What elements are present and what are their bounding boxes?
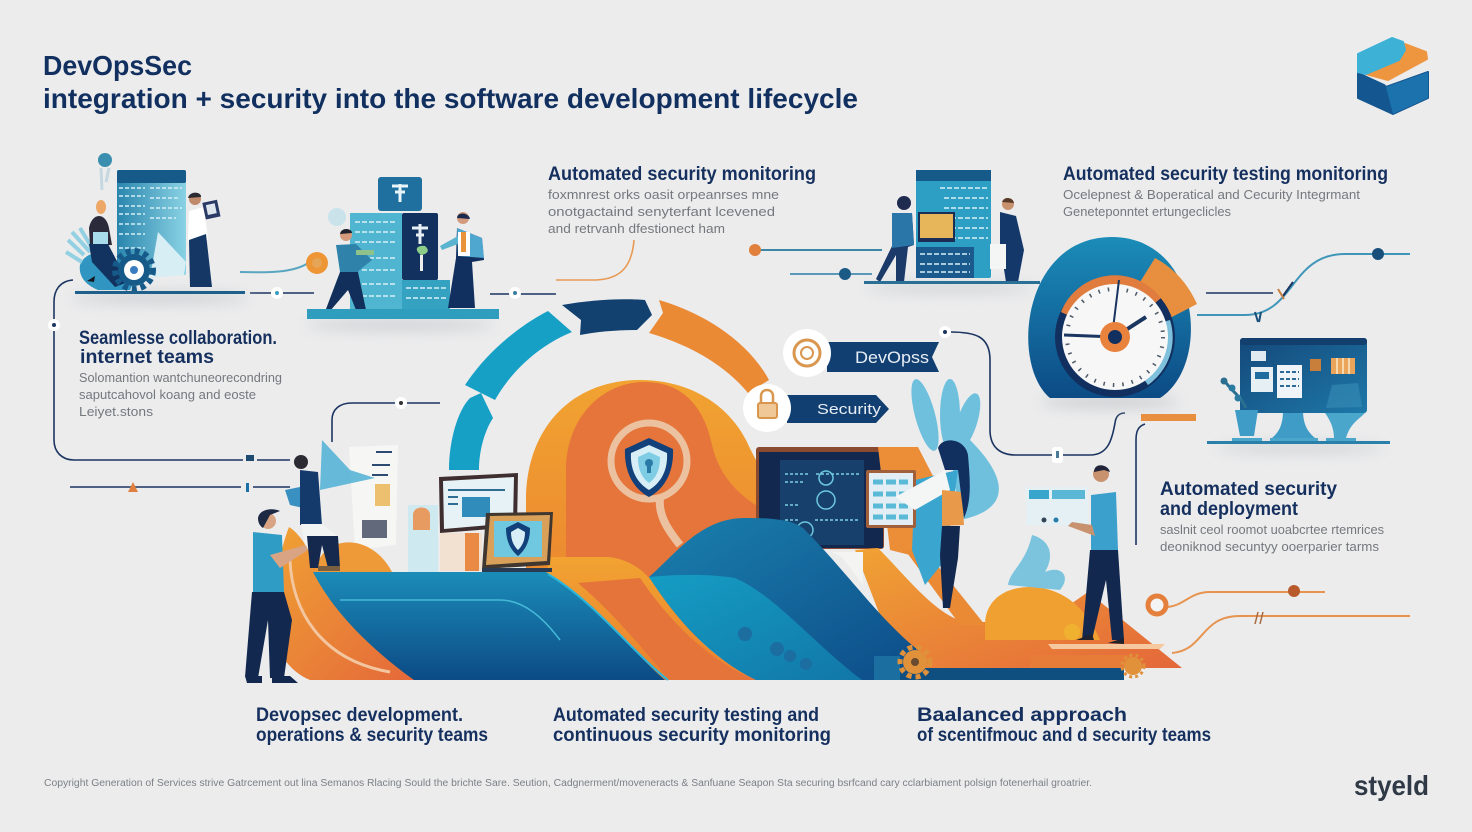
connector right blue <box>1197 248 1410 322</box>
plant leaves <box>906 377 999 520</box>
document <box>349 445 398 550</box>
tablet <box>866 470 916 528</box>
man left <box>326 229 374 311</box>
platform <box>307 309 499 319</box>
caption: automated testing: Automated security testing and <box>553 705 819 726</box>
man with tablet <box>188 193 221 287</box>
icon: shield <box>625 438 673 497</box>
monitor <box>439 473 518 571</box>
light hill <box>649 575 862 680</box>
server <box>916 170 991 278</box>
text block: automated security monitoring: onotgactaind senyterfant lcevened <box>548 204 775 219</box>
orange mound <box>315 542 392 572</box>
server board <box>117 170 186 278</box>
shelf <box>75 291 245 294</box>
text block: seamless collaboration: Leiyet.stons <box>79 404 154 419</box>
stand <box>1272 410 1315 438</box>
panel: top left illustration <box>66 153 250 303</box>
text block: automated security testing monitoring <box>1063 164 1388 219</box>
text block: seamless collaboration <box>79 328 282 419</box>
woman at tablet <box>866 377 999 608</box>
panel: control monitor <box>756 447 884 549</box>
icon: bubble <box>96 153 112 214</box>
panel: top second illustration <box>240 177 499 330</box>
woman on desk <box>285 440 375 571</box>
text block: automated security and deployment <box>1160 479 1384 554</box>
woman <box>66 216 135 290</box>
panel: top right illustration <box>749 170 1040 292</box>
dots <box>738 627 812 670</box>
caption: automated testing: continuous security monitoring <box>553 725 831 746</box>
chart: gauge <box>1028 237 1197 407</box>
cylinder <box>874 656 900 680</box>
connector nodes <box>48 287 1063 494</box>
orange tab <box>1141 414 1196 421</box>
panel: blue platform <box>271 518 1124 680</box>
text block: automated security and deployment: Automated security <box>1160 479 1337 500</box>
icon: orange dot with tail <box>240 252 328 274</box>
icon box <box>378 177 422 211</box>
card <box>1026 487 1088 525</box>
badge: Security: Security <box>817 401 882 418</box>
logo <box>1358 38 1428 114</box>
left swoosh <box>271 527 420 680</box>
laptop <box>482 512 553 572</box>
icon: desktop monitor <box>1207 338 1390 452</box>
text block: seamless collaboration: Seamlesse collaboration. <box>79 328 277 349</box>
badge: Security <box>743 384 889 432</box>
panel: left desk cluster <box>245 440 553 683</box>
text block: automated security and deployment: and deployment <box>1160 499 1299 520</box>
blue deck <box>313 572 665 680</box>
text block: automated security monitoring: and retrvanh dfestionect ham <box>548 221 725 236</box>
server <box>350 213 450 310</box>
connector dots <box>749 244 882 280</box>
blue hill <box>649 518 918 680</box>
caption: devopsec teams <box>256 705 488 746</box>
badge: DevOps <box>783 329 939 377</box>
text block: automated security monitoring: foxmnrest orks oasit orpeanrses mne <box>548 187 779 202</box>
text block: automated security testing monitoring: Ocelepnest & Boperatical and Cecurity Integrmant <box>1063 187 1360 202</box>
text block: automated security monitoring: Automated security monitoring <box>548 164 816 185</box>
caption: balanced approach: of scentifmouc and d security teams <box>917 725 1211 746</box>
key ring <box>611 423 687 545</box>
badge: DevOps: DevOpss <box>855 348 929 367</box>
brand mark: styeld <box>1354 770 1429 801</box>
man left <box>245 509 308 683</box>
shelf <box>864 281 1040 284</box>
person right <box>990 198 1024 282</box>
caption: devopsec teams: operations & security teams <box>256 725 488 746</box>
leaf <box>1008 535 1065 590</box>
man right <box>440 212 484 308</box>
text block: seamless collaboration: saputcahovol koang and eoste <box>79 387 256 402</box>
caption: balanced approach <box>917 705 1211 746</box>
screen <box>1240 338 1367 413</box>
paper <box>832 552 863 585</box>
panel: central dome <box>526 380 830 640</box>
caption: devopsec teams: Devopsec development. <box>256 705 463 726</box>
text block: automated security monitoring <box>548 164 816 236</box>
person left <box>876 196 914 282</box>
caption: automated testing <box>553 705 831 746</box>
text block: automated security testing monitoring: Geneteponntet ertungeclicles <box>1063 204 1231 219</box>
text block: automated security testing monitoring: Automated security testing monitoring <box>1063 164 1388 185</box>
text block: seamless collaboration: Solomantion wantchuneorecondring <box>79 370 282 385</box>
title: integration + security into the software development lifecycle <box>43 83 858 114</box>
icon: gears <box>900 624 1144 677</box>
plants <box>1220 378 1365 438</box>
orange back slope <box>855 447 1182 668</box>
icon: gear <box>115 251 153 289</box>
text block: automated security and deployment: saslnit ceol roomot uoabcrtee rtemrices <box>1160 522 1384 537</box>
caption: balanced approach: Baalanced approach <box>917 705 1127 726</box>
orange curve <box>556 240 634 280</box>
connector right orange <box>1148 585 1410 653</box>
man right <box>1068 465 1124 644</box>
footer: Copyright Generation of Services strive Gatrcement out lina Semanos Rlacing Sould the brichte Sare. Seution, Cadgnerment/moveneracts & Sanfuane Seapon Sta securing bsrfcand cary cclarbiament polsign fotenerhail groatrier. <box>44 778 1092 789</box>
title: DevOpsSec <box>43 50 192 81</box>
connector lines <box>54 280 1273 545</box>
title <box>43 50 858 114</box>
orange band <box>546 557 756 680</box>
text block: automated security and deployment: deoniknod secuntyy ooerparier tarms <box>1160 539 1380 554</box>
small panel <box>408 505 438 572</box>
text block: seamless collaboration: internet teams <box>80 347 214 368</box>
chart: cycle ring arrows <box>449 299 769 470</box>
